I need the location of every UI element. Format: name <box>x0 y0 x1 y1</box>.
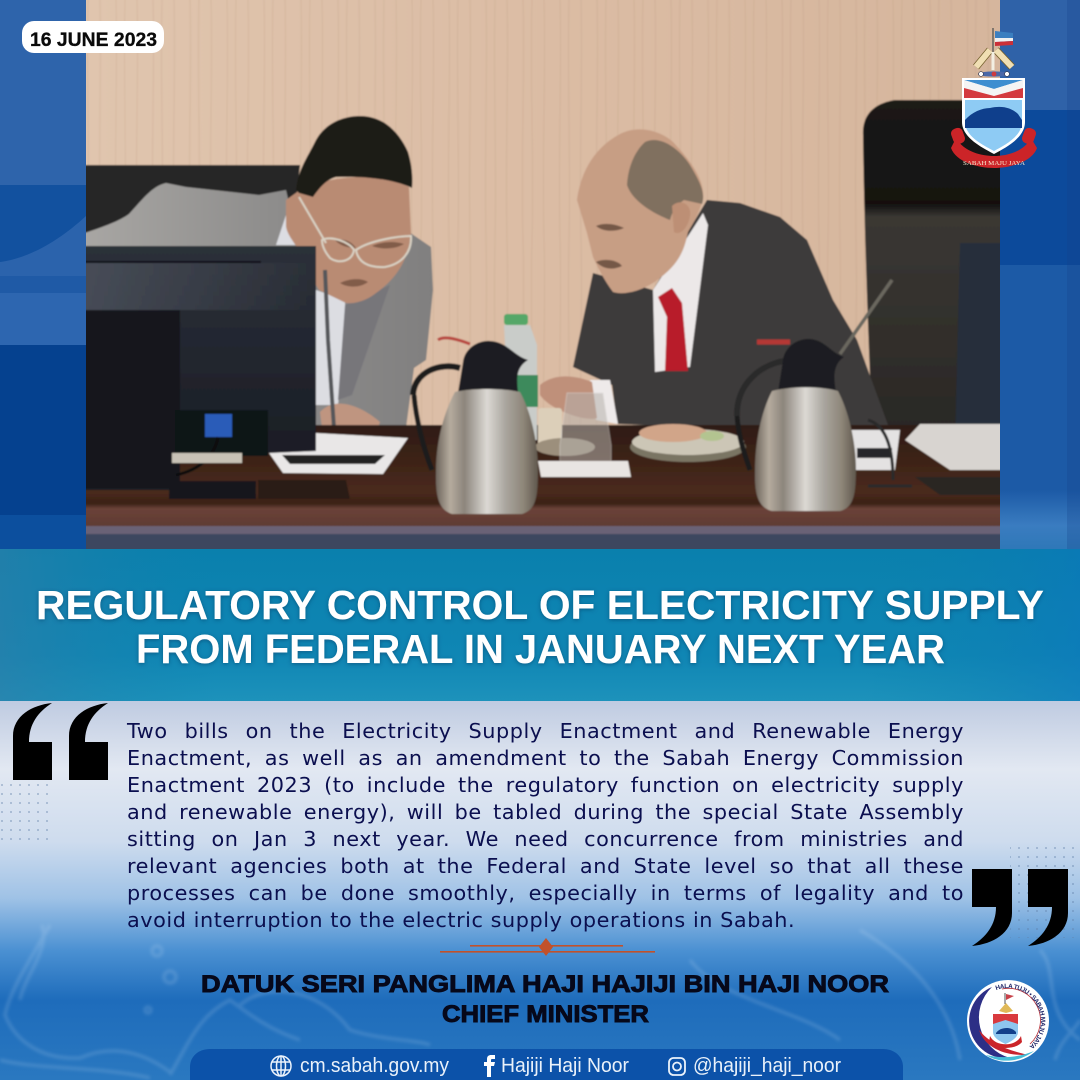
cup <box>538 408 562 448</box>
right monitor <box>956 243 1000 423</box>
closing quotation mark <box>972 869 1068 946</box>
small microphone base <box>868 420 912 486</box>
ornament divider <box>440 938 655 956</box>
quote body text: avoid interruption to the electric supply operations in Sabah. <box>127 908 795 932</box>
monitor back box <box>86 310 180 476</box>
white shirt <box>276 215 345 405</box>
eye and mouth <box>596 224 624 269</box>
instagram handle: @hajiji_haji_noor <box>693 1055 841 1077</box>
monitor left <box>70 246 316 499</box>
quote body text: Two bills on the Electricity Supply Enactment and Renewable Energy <box>127 719 964 743</box>
quote body text: processes can be done smoothly, especially in terms of legality and to <box>127 881 964 905</box>
white document <box>269 433 408 474</box>
table <box>86 424 1000 534</box>
hair <box>296 116 412 197</box>
lapel shadow <box>338 285 390 400</box>
quote body text <box>126 719 964 932</box>
right side blue panel <box>1000 0 1080 549</box>
quote body text: and renewable energy), will be tabled during the special State Assembly <box>127 800 964 824</box>
motto: SABAH MAJU JAYA <box>963 160 1025 167</box>
right papers <box>850 424 1015 495</box>
cuff <box>590 380 618 424</box>
circular badge logo <box>967 980 1049 1062</box>
badge ring text: HALA TUJU • SABAH MAJU JAYA <box>995 984 1046 1048</box>
facial shadows <box>335 239 404 287</box>
left thermos <box>413 338 538 514</box>
icon: facebook <box>484 1055 495 1077</box>
crest band <box>978 71 1010 77</box>
flag <box>993 28 1013 52</box>
icon: globe <box>271 1056 291 1076</box>
head <box>577 129 703 293</box>
hair <box>627 140 703 220</box>
table reflection <box>258 480 350 499</box>
photo: two men at a meeting table <box>70 0 1020 580</box>
left side blue panel <box>0 0 86 549</box>
right thermos <box>737 339 856 511</box>
left chair <box>86 164 301 234</box>
right microphone <box>840 280 892 354</box>
left water bottle <box>504 314 538 440</box>
face <box>286 177 411 303</box>
title: REGULATORY CONTROL OF ELECTRICITY SUPPLY <box>36 582 1044 628</box>
speaker name: DATUK SERI PANGLIMA HAJI HAJIJI BIN HAJI NOOR <box>201 971 889 998</box>
stand <box>175 410 268 456</box>
small crest <box>989 993 1022 1048</box>
speaker name <box>201 971 889 1028</box>
ear <box>672 202 690 233</box>
hand <box>540 376 597 419</box>
quote body text: Enactment 2023 (to include the regulatory function on electricity supply <box>127 773 964 797</box>
napkin <box>538 461 631 477</box>
date pill <box>22 21 164 53</box>
left man <box>70 116 433 428</box>
opening quotation mark <box>13 703 108 780</box>
quote body text: sitting on Jan 3 next year. We need concurrence from ministries and <box>127 827 964 851</box>
shield <box>962 78 1025 154</box>
quote panel background <box>0 701 1080 1080</box>
glass <box>560 393 611 462</box>
quote body text: Enactment, as well as an amendment to the Sabah Energy Commission <box>127 746 964 770</box>
icon: instagram <box>669 1058 685 1075</box>
facebook name: Hajiji Haji Noor <box>501 1055 629 1077</box>
red tie <box>658 288 688 371</box>
footer bar <box>190 1049 903 1080</box>
plate with food <box>630 424 746 462</box>
crest hands <box>976 50 1012 70</box>
teal title band <box>0 549 1080 701</box>
saucer <box>535 438 595 456</box>
wood wall <box>86 0 1000 426</box>
shirt <box>653 213 708 372</box>
speaker name: CHIEF MINISTER <box>442 1001 649 1028</box>
right man <box>540 129 888 428</box>
glasses <box>299 197 411 267</box>
website: cm.sabah.gov.my <box>300 1055 449 1077</box>
right chair <box>863 100 1015 425</box>
dark jacket <box>573 200 888 428</box>
date pill: 16 JUNE 2023 <box>30 30 157 51</box>
Sabah coat of arms <box>950 28 1037 168</box>
title: FROM FEDERAL IN JANUARY NEXT YEAR <box>136 626 945 672</box>
grey jacket <box>70 183 433 428</box>
hand <box>320 404 380 428</box>
microphone <box>325 270 334 428</box>
title <box>36 582 1044 672</box>
quote body text: relevant agencies both at the Federal and State level so that all these <box>127 854 964 878</box>
